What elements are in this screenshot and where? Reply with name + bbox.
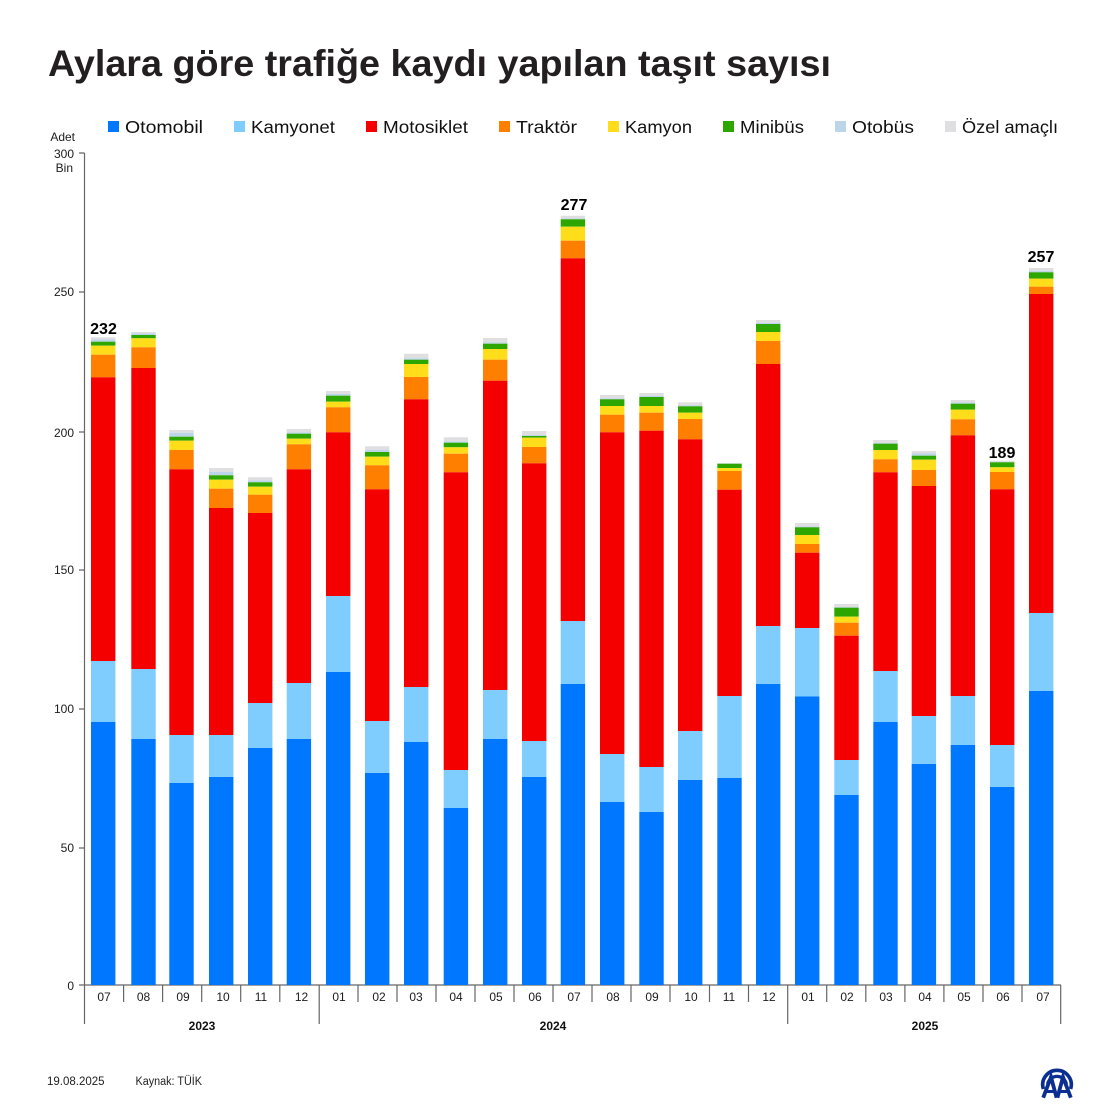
x axis: 08 bbox=[137, 990, 150, 1004]
bar 2024-09 bbox=[639, 393, 664, 985]
y axis: 300 bbox=[54, 147, 74, 161]
total labels: 257 bbox=[1028, 249, 1054, 266]
legend item: Kamyonet: Kamyonet bbox=[251, 117, 335, 137]
y axis: 50 bbox=[61, 841, 74, 855]
legend item: Kamyon: Kamyon bbox=[625, 117, 692, 137]
bar 2025-07 bbox=[1029, 268, 1053, 985]
bar 2025-03 bbox=[873, 440, 898, 985]
legend bbox=[108, 117, 1058, 137]
bar 2024-08 bbox=[600, 395, 624, 985]
bar 2023-10 bbox=[209, 468, 233, 985]
x axis: 11 bbox=[255, 990, 268, 1004]
y axis: 250 bbox=[54, 285, 74, 299]
x axis: 12 bbox=[295, 990, 308, 1004]
bar 2024-11 bbox=[717, 463, 742, 985]
x axis: 06 bbox=[996, 990, 1010, 1004]
legend item: Motosiklet: Motosiklet bbox=[383, 117, 468, 137]
x axis: 02 bbox=[840, 990, 854, 1004]
legend item: Otomobil: Otomobil bbox=[125, 117, 203, 137]
bar 2025-04 bbox=[912, 451, 936, 985]
total labels: 232 bbox=[90, 321, 117, 338]
stacked bar chart bbox=[91, 216, 1053, 985]
title: Aylara göre trafiğe kaydı yapılan taşıt sayısı bbox=[48, 43, 831, 84]
bar 2024-10 bbox=[678, 402, 702, 985]
bar 2025-01 bbox=[795, 523, 819, 985]
x axis: 07 bbox=[97, 990, 111, 1004]
x axis: 07 bbox=[567, 990, 581, 1004]
x axis: 2025 bbox=[912, 1019, 939, 1033]
x axis: 04 bbox=[918, 990, 932, 1004]
legend item: Özel amaçlı: Özel amaçlı bbox=[962, 117, 1058, 137]
y axis: 100 bbox=[54, 702, 74, 716]
x axis: 05 bbox=[957, 990, 971, 1004]
date: 19.08.2025 bbox=[47, 1076, 104, 1088]
x axis: 01 bbox=[801, 990, 815, 1004]
bar 2023-09 bbox=[169, 430, 194, 985]
bar 2023-08 bbox=[131, 332, 156, 985]
x axis: 02 bbox=[372, 990, 386, 1004]
legend item: Otobüs: Otobüs bbox=[852, 117, 914, 137]
x axis: 11 bbox=[723, 990, 736, 1004]
x axis: 03 bbox=[879, 990, 893, 1004]
y axis: 150 bbox=[54, 563, 74, 577]
legend item: Minibüs: Minibüs bbox=[740, 117, 804, 137]
bar 2023-12 bbox=[287, 429, 311, 985]
bar 2025-06 bbox=[990, 461, 1014, 985]
x axis: 08 bbox=[606, 990, 620, 1004]
x axis: 09 bbox=[645, 990, 659, 1004]
x axis: 10 bbox=[216, 990, 230, 1004]
bar 2024-02 bbox=[365, 446, 389, 985]
total labels: 277 bbox=[561, 197, 587, 214]
bar 2024-07 bbox=[561, 216, 585, 985]
x axis: 2024 bbox=[540, 1019, 567, 1033]
bar 2025-05 bbox=[951, 400, 975, 985]
y axis: 0 bbox=[67, 979, 74, 993]
x axis: 07 bbox=[1036, 990, 1050, 1004]
bar 2024-04 bbox=[444, 437, 468, 985]
y axis bbox=[50, 130, 1061, 1024]
y axis: Bin bbox=[56, 161, 73, 175]
bar 2024-12 bbox=[756, 320, 780, 985]
bar 2025-02 bbox=[834, 604, 859, 985]
y axis: Adet bbox=[50, 130, 76, 144]
bar 2024-05 bbox=[483, 338, 507, 985]
x axis: 05 bbox=[489, 990, 503, 1004]
x axis bbox=[97, 985, 1061, 1033]
x axis: 04 bbox=[449, 990, 463, 1004]
bar 2024-03 bbox=[404, 354, 428, 985]
total labels bbox=[90, 197, 1054, 462]
x axis: 09 bbox=[176, 990, 190, 1004]
x axis: 2023 bbox=[189, 1019, 216, 1033]
x axis: 06 bbox=[528, 990, 542, 1004]
total labels: 189 bbox=[989, 445, 1015, 462]
bar 2024-01 bbox=[326, 391, 350, 985]
bar 2024-06 bbox=[522, 431, 546, 985]
x axis: 12 bbox=[762, 990, 776, 1004]
legend item: Traktör: Traktör bbox=[516, 117, 577, 137]
x axis: 10 bbox=[684, 990, 698, 1004]
x axis: 03 bbox=[409, 990, 423, 1004]
y axis: 200 bbox=[54, 426, 74, 440]
icon: AA logo bbox=[1043, 1070, 1071, 1098]
source: Kaynak: TÜİK bbox=[136, 1075, 202, 1088]
bar 2023-07 bbox=[91, 337, 115, 985]
x axis: 01 bbox=[332, 990, 346, 1004]
bar 2023-11 bbox=[248, 477, 272, 985]
